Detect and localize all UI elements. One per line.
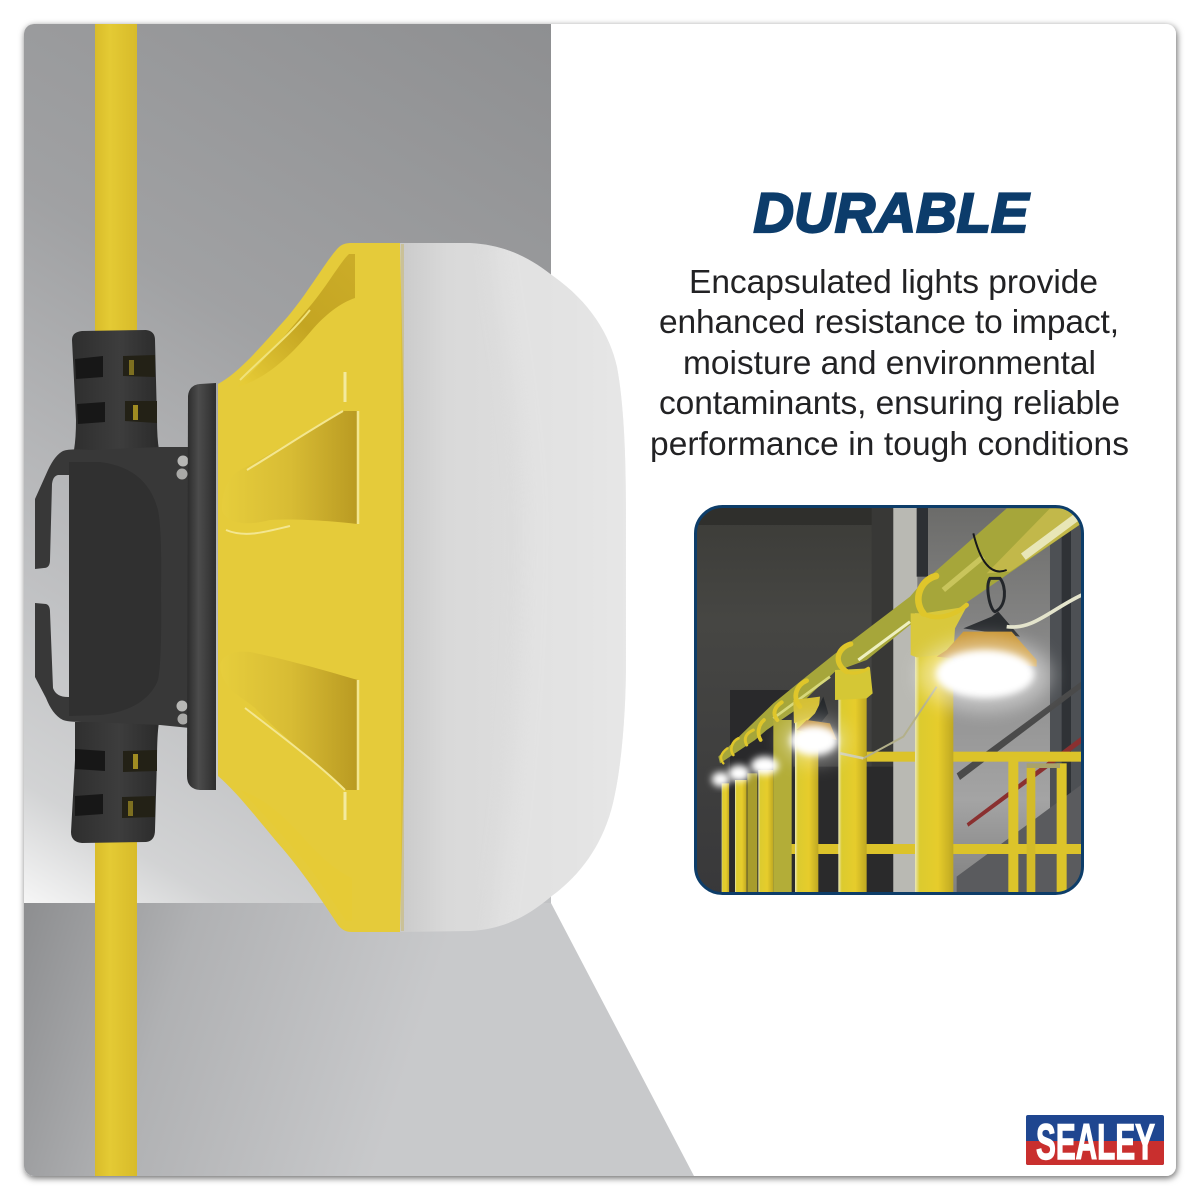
lower recess: [220, 652, 358, 790]
posts: [722, 783, 729, 897]
fixing screws: [176, 456, 188, 724]
bottom channel shading: [240, 790, 352, 921]
heading: DURABLE: [754, 181, 1030, 244]
lamp housings: [937, 632, 1037, 667]
pipe collars: [721, 576, 967, 763]
lamp hanger: [973, 533, 1007, 571]
top channel shading: [237, 254, 355, 387]
lamp cable: [863, 687, 937, 758]
backgrounds: [697, 525, 872, 892]
lamp lens dome: [400, 243, 626, 932]
connector top collar: [72, 330, 159, 450]
description text: moisture and environmental: [683, 345, 1096, 382]
collar slots: [75, 355, 157, 424]
rim edge: [401, 244, 404, 931]
connector bottom collar: [71, 722, 159, 843]
upper recess: [222, 411, 358, 524]
bracket inner face: [69, 462, 161, 716]
yellow lamp housing: [218, 243, 404, 932]
grey backdrop: wall and floor: [24, 24, 694, 1176]
connector flange: [187, 383, 216, 790]
description text: enhanced resistance to impact,: [659, 304, 1119, 341]
connector bracket: [35, 447, 190, 728]
site photo of lights on yellow railing: [690, 500, 1087, 900]
diagonal top rail: [718, 508, 1082, 763]
glossy highlights: [357, 411, 359, 790]
description text: contaminants, ensuring reliable: [659, 385, 1120, 422]
collar slots: [75, 749, 157, 818]
description text: Encapsulated lights provide: [689, 264, 1098, 301]
description text: [650, 264, 1129, 463]
description text: performance in tough conditions: [650, 426, 1129, 463]
side rails: [867, 752, 1083, 762]
lamp glows: [918, 638, 1052, 712]
yellow cable: [95, 24, 137, 1176]
